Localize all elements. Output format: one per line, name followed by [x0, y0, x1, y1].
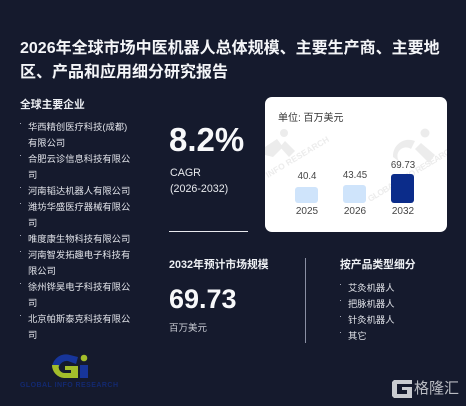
title: 区、产品和应用细分研究报告 [20, 64, 228, 81]
title [20, 39, 440, 81]
product type list: 针灸机器人 [348, 315, 394, 325]
panel: top global companies [20, 98, 130, 340]
title: 2026年全球市场中医机器人总体规模、主要生产商、主要地 [20, 40, 440, 57]
CAGR label [170, 167, 228, 195]
bar 2026: 2026 [344, 206, 366, 217]
heading: top companies: 全球主要企业 [20, 99, 85, 111]
company list: 河南智发拓趣电子科技有 [28, 250, 130, 260]
watermark [265, 128, 447, 204]
watermark: INFO RESEARCH [265, 134, 331, 180]
CAGR label: CAGR [170, 167, 201, 179]
company list: 潍坊华盛医疗器械有限公 [28, 202, 130, 212]
bar 2025: 40.4 [298, 171, 316, 182]
panel: product types [340, 258, 416, 341]
logo: Global Info Research [20, 354, 118, 389]
product type list: 艾灸机器人 [348, 283, 394, 293]
unit label: 单位: 百万美元 [278, 113, 344, 124]
product type list: 把脉机器人 [348, 299, 394, 309]
bar 2025: 2025 [296, 206, 318, 217]
panel: CAGR [169, 121, 244, 195]
company list: 北京帕斯泰克科技有限公 [28, 314, 130, 324]
company list: 限公司 [28, 266, 56, 276]
product type list: 其它 [348, 331, 367, 341]
heading: product types: 按产品类型细分 [340, 259, 416, 271]
bar 2032: 69.73 [391, 160, 415, 171]
CAGR value: 8.2% [169, 121, 244, 158]
bar 2032: 2032 [392, 206, 414, 217]
company list: 唯度康生物科技有限公司 [28, 234, 130, 244]
product type list [340, 283, 394, 341]
bar chart [295, 160, 415, 217]
unit: 百万美元 [169, 323, 207, 334]
logo: Gelonghui [392, 380, 459, 398]
company list: 司 [28, 170, 37, 180]
bar 2025 [295, 171, 318, 217]
brand name: 格隆汇 [414, 380, 459, 397]
heading: market size: 2032年预计市场规模 [169, 259, 269, 271]
company list: 河南韬达机器人有限公司 [28, 186, 130, 196]
company list: 司 [28, 298, 37, 308]
company list: 司 [28, 218, 37, 228]
company list [20, 122, 130, 340]
bar 2026: 43.45 [343, 170, 367, 181]
icon: G mark [392, 380, 412, 398]
company list: 有限公司 [28, 138, 65, 148]
CAGR label: (2026-2032) [170, 183, 228, 195]
company list: 司 [28, 330, 37, 340]
company list: 合肥云诊信息科技有限公 [28, 154, 130, 164]
bar 2026 [343, 170, 367, 217]
panel: 2032 market size [169, 258, 269, 334]
bar 2032 [391, 160, 415, 217]
market size value: 69.73 [169, 284, 237, 314]
logo: Global Info Research: GLOBAL INFO RESEARCH [20, 382, 118, 389]
company list: 华西精创医疗科技(成都) [28, 122, 127, 132]
company list: 徐州铧昊电子科技有限公 [28, 282, 130, 292]
panel: bar chart card [265, 97, 447, 232]
